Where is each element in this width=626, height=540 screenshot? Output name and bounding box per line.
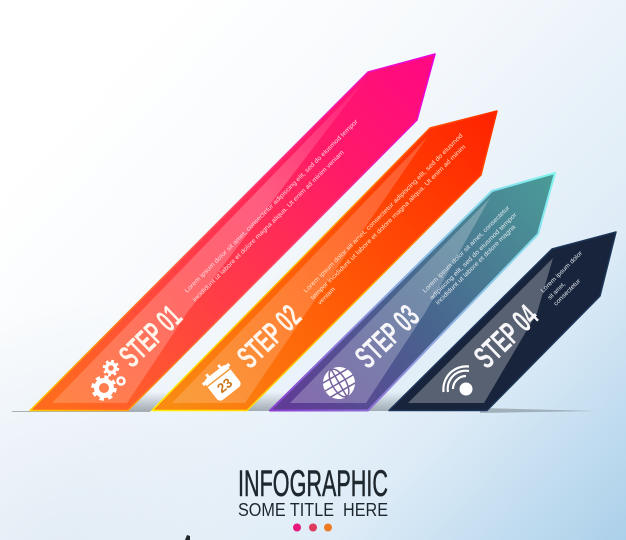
- step 01 description: Lorem ipsum dolor sit amet, consectetur adipiscing elit, sed do eiusmod tempor: [183, 118, 360, 294]
- icon: gears: [93, 361, 124, 399]
- highlight facet 4: [408, 258, 553, 403]
- highlight facet 3: [290, 198, 490, 403]
- arrow body 1: [30, 54, 435, 410]
- step 04 description: Lorem ipsum dolor: [539, 250, 584, 294]
- panel: step 02 arrow: [152, 111, 497, 410]
- arrow body 2: [152, 111, 497, 410]
- subheading: some title here: SOME TITLE HERE: [238, 500, 388, 520]
- step 02 description: tempor incididunt ut labore et dolore magna aliqua. Ut enim ad minim: [309, 144, 467, 301]
- heading: infographic: INFOGRAPHIC: [238, 463, 388, 504]
- panel: step 04 arrow: [389, 232, 616, 410]
- step 03 description: adipiscing elit, sed do eiusmod tempor: [428, 212, 518, 301]
- panel: step 01 arrow: [30, 54, 435, 410]
- highlight facet 1: [52, 80, 365, 403]
- panel: step 03 arrow: [270, 173, 555, 410]
- step 03 description: Lorem ipsum dolor sit amet, consectetur: [421, 205, 511, 294]
- arrow body 4: [389, 232, 616, 410]
- decorative dots: [293, 524, 332, 532]
- step 04 description: consectetur: [552, 278, 582, 307]
- icon: calendar: 23: [214, 375, 235, 396]
- step 02 description: veniam: [316, 286, 337, 306]
- highlight facet 2: [172, 136, 428, 403]
- icon: wifi signal: [443, 366, 472, 396]
- small cropped mark: [185, 535, 190, 540]
- step 02 description: Lorem ipsum dolor sit amet, consectetur adipiscing elit, sed do eiusmod: [302, 132, 465, 294]
- step 01 description: incididunt ut labore et dolore magna aliqua. Ut enim ad minim veniam: [191, 149, 346, 303]
- title: [238, 463, 388, 520]
- arrow body 3: [270, 173, 555, 410]
- step 04 label: STEP 04: [467, 298, 545, 375]
- icon: globe: [317, 361, 361, 405]
- step 01 label: STEP 01: [112, 298, 189, 374]
- step 03 description: incididunt ut labore et dolore magna: [434, 223, 518, 306]
- icon: calendar: [199, 359, 244, 404]
- step 02 label: STEP 02: [230, 298, 308, 375]
- ground shadow: [12, 392, 596, 413]
- step 04 description: sit amet,: [546, 281, 567, 301]
- step 03 description: [421, 205, 518, 306]
- step 04 description: [539, 250, 584, 307]
- step 03 label: STEP 03: [348, 298, 426, 375]
